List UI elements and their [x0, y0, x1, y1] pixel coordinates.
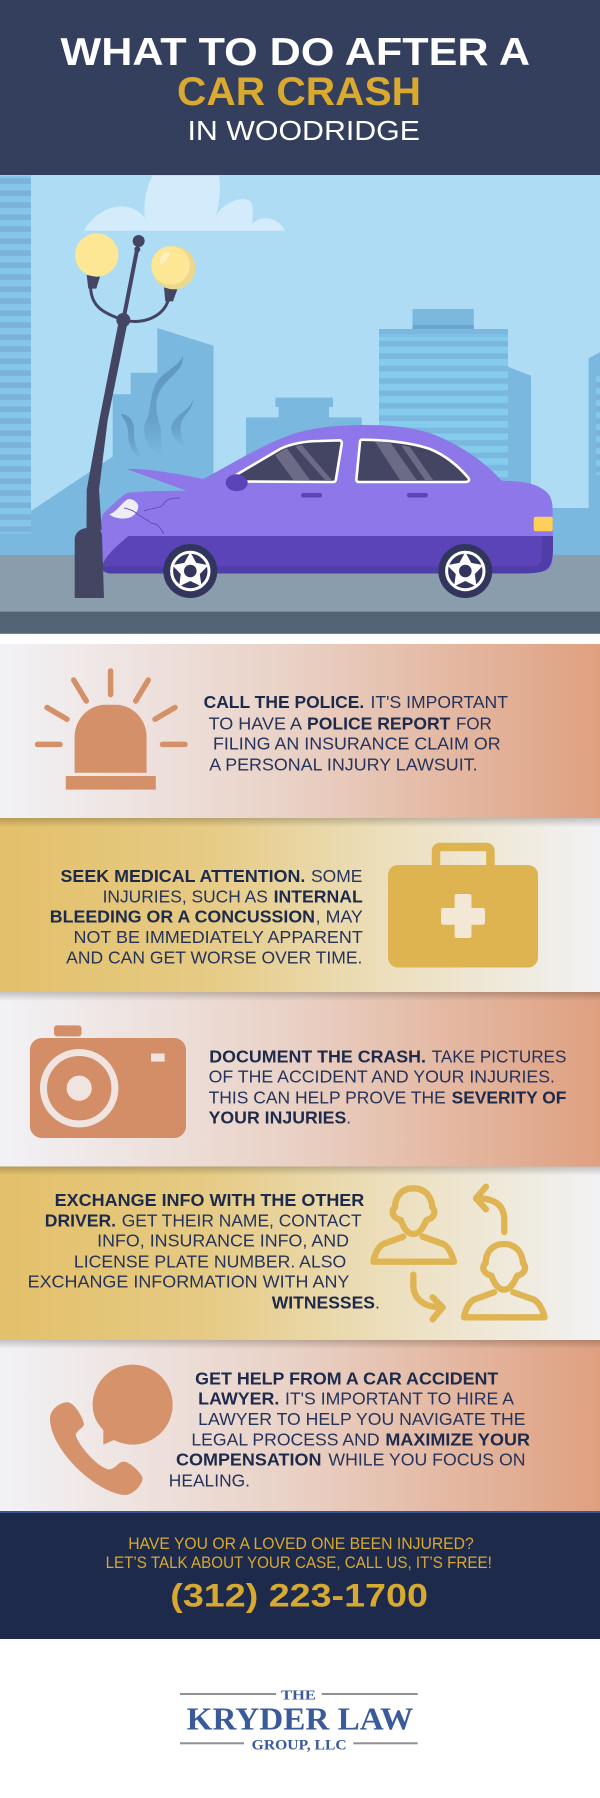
broken headlight	[109, 499, 138, 519]
text: document the crash: THIS CAN HELP PROVE THE	[209, 1088, 446, 1108]
text: get help: GET HELP FROM A CAR ACCIDENT	[195, 1368, 499, 1388]
logo: the kryder law group: KRYDER LAW	[187, 1700, 413, 1736]
arrow down	[413, 1275, 443, 1319]
rear wheel	[438, 544, 492, 598]
rear window	[356, 440, 469, 482]
text: get help: MAXIMIZE YOUR	[385, 1430, 530, 1450]
text: get help	[169, 1368, 530, 1490]
text: call the police: POLICE REPORT	[307, 713, 451, 733]
text: exchange info: EXCHANGE INFORMATION WITH ANY	[28, 1272, 350, 1292]
icon: siren	[38, 671, 185, 790]
lamp globe left	[75, 233, 118, 277]
text: exchange info: DRIVER.	[45, 1210, 116, 1230]
text: seek medical attention: SOME	[311, 866, 362, 886]
logo: the kryder law group	[180, 1688, 418, 1753]
title: WHAT TO DO AFTER A	[60, 31, 530, 74]
front window	[236, 440, 342, 482]
call to action invite: LET’S TALK ABOUT YOUR CASE, CALL US, IT’S FREE!	[106, 1554, 492, 1572]
call to action band	[0, 1511, 600, 1639]
logo: the kryder law group: GROUP, LLC	[252, 1737, 347, 1753]
logo: the kryder law group: THE	[281, 1688, 316, 1703]
text: document the crash: DOCUMENT THE CRASH.	[209, 1046, 426, 1066]
smoke from engine	[121, 356, 194, 459]
text: document the crash: .	[346, 1108, 351, 1128]
text: seek medical attention: BLEEDING OR A CONCUSSION	[50, 906, 315, 926]
hood cracks	[124, 498, 180, 534]
text: exchange info: LICENSE PLATE NUMBER. ALSO	[74, 1251, 346, 1271]
text: document the crash: YOUR INJURIES	[209, 1108, 346, 1128]
person one	[373, 1188, 454, 1262]
icon: camera	[30, 1025, 186, 1138]
title highlight: CAR CRASH	[177, 70, 421, 114]
text: exchange info: GET THEIR NAME, CONTACT	[122, 1210, 362, 1230]
car lower band	[102, 536, 553, 574]
panel: seek medical attention	[0, 818, 600, 992]
side mirror	[226, 474, 248, 491]
text: exchange info: EXCHANGE INFO WITH THE OTHER	[55, 1190, 365, 1210]
text: call the police: FOR	[456, 713, 492, 733]
person two	[464, 1244, 545, 1317]
icon: two people exchanging	[373, 1187, 545, 1319]
text: seek medical attention: , MAY	[316, 906, 363, 926]
cloud	[84, 176, 285, 231]
illustration: crashed car in city street	[0, 175, 600, 634]
panel: exchange info	[0, 1166, 600, 1340]
text: get help: LEGAL PROCESS AND	[191, 1430, 380, 1450]
text: document the crash: SEVERITY OF	[452, 1088, 567, 1108]
road	[0, 555, 600, 612]
car body	[100, 425, 553, 574]
header panel	[0, 0, 600, 176]
text: call the police: TO HAVE A	[209, 713, 302, 733]
text: document the crash: OF THE ACCIDENT AND YOUR INJURIES.	[209, 1067, 555, 1087]
text: document the crash: TAKE PICTURES	[432, 1046, 566, 1066]
call to action question: HAVE YOU OR A LOVED ONE BEEN INJURED?	[128, 1535, 474, 1553]
text: call the police	[204, 692, 508, 774]
skyline buildings	[0, 309, 600, 560]
arrow up	[476, 1187, 504, 1232]
panel: get help from a lawyer	[0, 1340, 600, 1512]
text: document the crash	[209, 1046, 567, 1128]
text: exchange info: INFO, INSURANCE INFO, AND	[97, 1230, 349, 1250]
text: seek medical attention: AND CAN GET WORSE OVER TIME.	[66, 947, 362, 967]
text: call the police: IT'S IMPORTANT	[370, 692, 508, 712]
text: get help: IT'S IMPORTANT TO HIRE A	[285, 1388, 514, 1408]
text: seek medical attention: INTERNAL	[274, 886, 363, 906]
bent street lamp	[75, 233, 195, 598]
text: get help: WHILE YOU FOCUS ON	[328, 1450, 526, 1470]
text: call the police: FILING AN INSURANCE CLAIM OR	[213, 733, 501, 753]
sky	[0, 175, 600, 634]
car hood	[127, 469, 203, 492]
icon: first aid kit	[388, 847, 538, 968]
car	[100, 425, 553, 598]
subtitle: IN WOODRIDGE	[188, 115, 420, 146]
panel: document the crash	[0, 992, 600, 1166]
front wheel	[163, 544, 217, 598]
text: call the police: A PERSONAL INJURY LAWSUIT.	[209, 754, 478, 774]
text: seek medical attention	[50, 866, 363, 967]
text: get help: HEALING.	[169, 1470, 250, 1490]
text: exchange info	[28, 1190, 380, 1312]
text: exchange info: WITNESSES	[272, 1292, 375, 1312]
text: seek medical attention: NOT BE IMMEDIATELY APPARENT	[74, 927, 363, 947]
tail light	[534, 517, 553, 531]
text: get help: LAWYER TO HELP YOU NAVIGATE THE	[198, 1409, 525, 1429]
text: seek medical attention: SEEK MEDICAL ATTENTION.	[60, 866, 305, 886]
icon: phone and speech bubble	[50, 1365, 173, 1495]
text: exchange info: .	[375, 1292, 380, 1312]
text: seek medical attention: INJURIES, SUCH AS	[103, 886, 268, 906]
panel: call the police	[0, 644, 600, 818]
lamp globe right	[151, 246, 195, 289]
door handles	[301, 493, 322, 498]
text: get help: COMPENSATION	[176, 1450, 322, 1470]
left striped building	[0, 176, 31, 534]
phone number: (312) 223-1700	[170, 1578, 428, 1614]
text: get help: LAWYER.	[198, 1388, 279, 1408]
text: call the police: CALL THE POLICE.	[204, 692, 364, 712]
